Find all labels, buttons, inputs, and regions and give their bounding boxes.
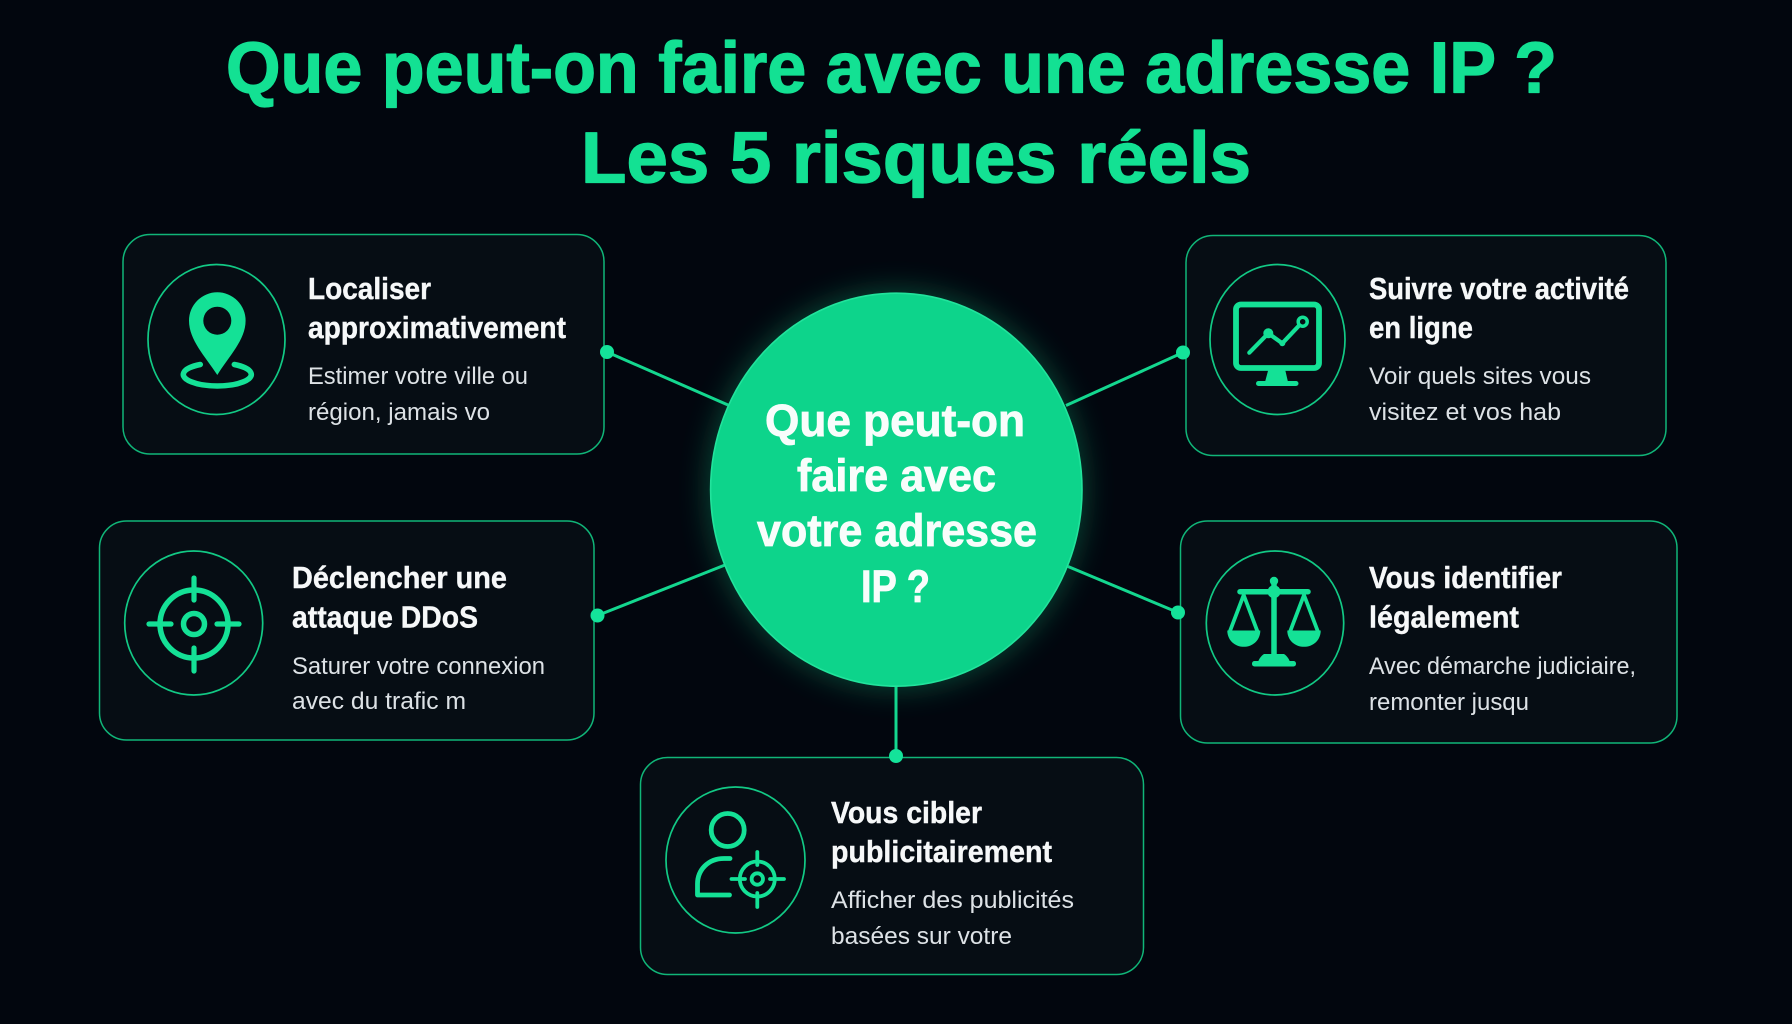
text: localiser description: Estimer votre ville ou (308, 363, 528, 390)
connector: bottom left (590, 565, 725, 622)
heading: déclencher une attaque: Déclencher une (292, 560, 507, 595)
center text: Que peut-on (765, 395, 1025, 446)
connector: bottom right (1068, 566, 1185, 620)
panel: vous identifier légalement (1180, 521, 1677, 743)
title (226, 29, 1557, 199)
icon: crosshair target (149, 578, 239, 671)
text: cibler description: basées sur votre (831, 923, 1012, 950)
text: identifier description: remonter jusqu (1369, 689, 1529, 716)
heading: vous cibler (831, 795, 1052, 869)
center node (706, 289, 1086, 691)
heading: vous identifier: Vous identifier (1369, 560, 1562, 595)
text: attaque description (292, 653, 545, 715)
title: Les 5 risques réels (581, 119, 1251, 199)
heading: suivre votre activité (1369, 271, 1629, 345)
icon: location pin (183, 292, 251, 386)
icon: scales of justice (1227, 577, 1321, 666)
center text: IP ? (861, 561, 930, 612)
icon: person with target (698, 814, 784, 907)
text: suivre description: Voir quels sites vous (1369, 363, 1591, 390)
panel: vous cibler publicitairement (640, 758, 1144, 974)
text: attaque description: avec du trafic m (292, 688, 466, 715)
heading: localiser (308, 271, 566, 345)
connector: bottom (889, 684, 903, 763)
heading: vous cibler: Vous cibler (831, 795, 982, 830)
text: identifier description: Avec démarche judiciaire, (1369, 653, 1636, 680)
heading: suivre votre activité: Suivre votre activité (1369, 271, 1629, 306)
heading: vous cibler: publicitairement (831, 834, 1052, 869)
text: localiser description (308, 363, 528, 426)
center text: votre adresse (757, 505, 1037, 556)
panel: déclencher une attaque DDoS (100, 521, 594, 740)
panel: localiser approximativement (123, 234, 604, 454)
text: cibler description (831, 887, 1074, 950)
text: identifier description (1369, 653, 1636, 716)
center text (757, 395, 1037, 612)
heading: déclencher une attaque (292, 560, 507, 635)
heading: vous identifier: légalement (1369, 600, 1519, 635)
text: cibler description: Afficher des publicités (831, 887, 1074, 914)
title: Que peut-on faire avec une adresse IP ? (226, 29, 1557, 109)
heading: suivre votre activité: en ligne (1369, 310, 1473, 345)
heading: localiser: Localiser (308, 271, 431, 306)
center text: faire avec (797, 450, 996, 501)
text: attaque description: Saturer votre connexion (292, 653, 545, 680)
text: suivre description (1369, 363, 1591, 426)
icon: monitor with chart (1236, 304, 1319, 386)
text: localiser description: région, jamais vo (308, 399, 490, 426)
text: suivre description: visitez et vos hab (1369, 399, 1561, 426)
heading: déclencher une attaque: attaque DDoS (292, 600, 478, 635)
connector: top right (1066, 346, 1190, 406)
connector: top left (600, 345, 728, 405)
heading: localiser: approximativement (308, 310, 566, 345)
heading: vous identifier (1369, 560, 1562, 635)
panel: suivre votre activité (1186, 236, 1666, 456)
